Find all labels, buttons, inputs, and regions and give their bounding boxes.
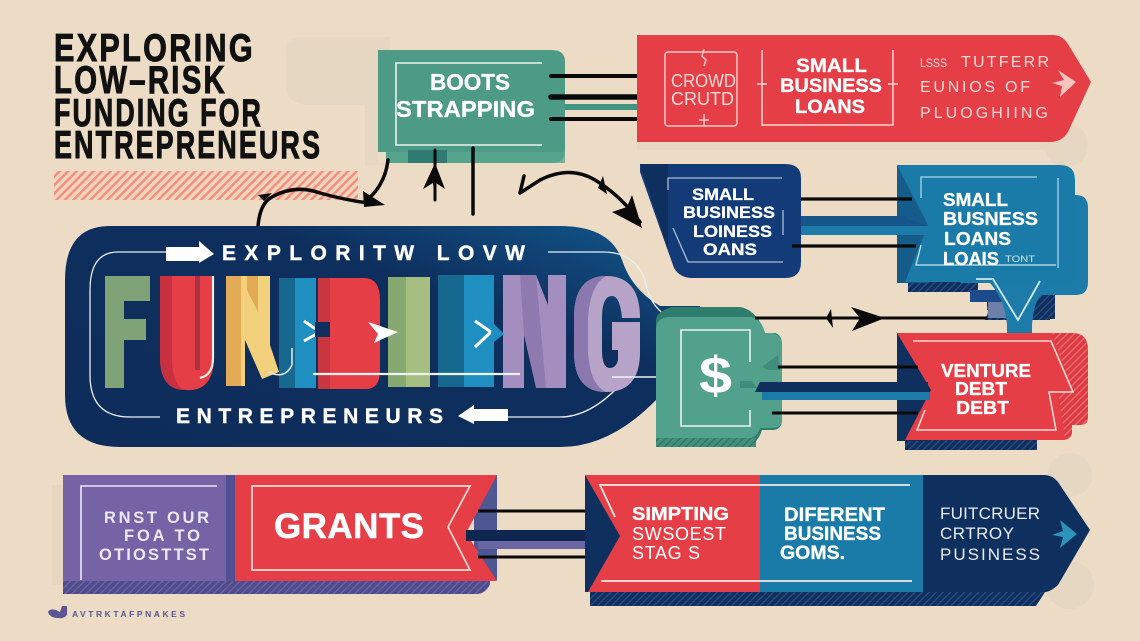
panel: venture debt: DEBT [956, 398, 1009, 418]
panel: navy small business loans: OANS [703, 240, 757, 259]
small business loans: SMALL [796, 56, 867, 77]
letter F [105, 276, 150, 388]
panel: venture debt [897, 333, 1088, 450]
icon: arrow [1052, 70, 1076, 97]
red segment text [632, 504, 729, 563]
crowd box [665, 49, 737, 126]
panel: venture debt: DEBT [955, 379, 1007, 399]
blue segment text: GOMS. [780, 543, 845, 564]
title: EXPLORING [54, 27, 255, 70]
letter I blue second [438, 275, 494, 387]
body text: EUNIOS OF [920, 79, 1030, 96]
panel: blue small business loans callout: SMALL [943, 190, 1008, 210]
funding chevrons and lines [268, 321, 690, 377]
letter U [160, 276, 214, 390]
funding word [105, 275, 640, 392]
title [54, 27, 322, 167]
body text: TUTFERR [961, 54, 1049, 71]
purple text: OTIOSTTST [99, 546, 209, 564]
panel: venture debt: VENTURE [941, 361, 1031, 381]
subheading: entrepreneurs: ENTREPRENEURS [176, 405, 443, 428]
connectors: grants to right row [466, 511, 613, 557]
icon: teal arrow [1052, 520, 1077, 548]
blue segment text: BUSINESS [784, 524, 881, 545]
inner outline [90, 252, 680, 417]
red segment text: SWSOEST [632, 524, 726, 544]
segment: navy arrow [923, 475, 1090, 592]
footer logo [48, 606, 185, 619]
navy segment text: FUITCRUER [940, 504, 1040, 523]
title: LOW–RISK [54, 59, 227, 102]
body text: LSSS [920, 56, 947, 70]
panel: boots strapping [378, 50, 565, 163]
small business loans: LOANS [795, 97, 865, 118]
arrow: left [458, 405, 508, 424]
segment: blue [760, 475, 923, 592]
boots strapping label: BOOTS [430, 69, 510, 95]
panel: grants row [63, 475, 497, 594]
panel: main funding bottle [65, 226, 700, 447]
panel: dollar box [656, 307, 782, 447]
panel: navy small business loans: SMALL [692, 185, 754, 204]
hatched accent bar [54, 171, 358, 200]
letter N purple [503, 275, 566, 388]
boots strapping label: STRAPPING [396, 96, 535, 122]
panel: blue small business loans callout: BUSNESS [943, 209, 1038, 229]
title: FUNDING FOR [54, 92, 263, 135]
icon: dollar sign: $ [699, 347, 732, 405]
red segment text: STAG S [632, 543, 700, 563]
panel: blue small business loans callout: LOAIS [943, 249, 999, 269]
small business loans: BUSINESS [780, 76, 882, 97]
connectors: dollar box to venture debt [755, 307, 987, 413]
body text [920, 54, 1049, 122]
navy segment text: PUSINESS [940, 545, 1040, 564]
letter I blue [279, 278, 316, 388]
letter D red [318, 278, 380, 389]
connector lines: bootstrapping to red banner [551, 76, 657, 119]
letter I green [388, 277, 430, 387]
purple text [99, 509, 209, 564]
heading: exploritw lovw: EXPLORITW LOVW [222, 242, 525, 265]
title: ENTREPRENEURS [54, 124, 322, 167]
segment: red [585, 475, 760, 592]
letter N [226, 276, 279, 386]
crowd box: CROWD [671, 71, 736, 91]
purple text: RNST OUR [104, 509, 209, 527]
connectors: navy to blue callout [792, 199, 928, 246]
panel: navy small business loans [640, 164, 801, 278]
red segment text: SIMPTING [632, 504, 729, 524]
panel: navy small business loans: BUSINESS [683, 203, 775, 222]
small business loans [757, 50, 898, 125]
crowd box: CRUTD [671, 89, 734, 109]
navy segment text [940, 504, 1040, 564]
curved arrows [258, 148, 642, 228]
purple text: FOA TO [124, 527, 200, 545]
panel: blue small business loans callout [897, 165, 1088, 351]
boots strapping label [396, 69, 535, 122]
body text: PLUOGHIING [920, 105, 1048, 122]
panel: blue small business loans callout: LOANS [944, 229, 1011, 249]
panel: small business loans red banner [637, 35, 1091, 142]
letter G purple [574, 276, 640, 392]
footer logo: AVTRKTAFPNAKES [72, 609, 185, 619]
blue segment text: DIFERENT [784, 505, 885, 526]
blue segment text [780, 505, 885, 564]
panel: blue small business loans callout: TONT [1005, 254, 1036, 264]
panel: right bottom arrow row [585, 475, 1090, 606]
navy segment text: CRTROY [940, 524, 1014, 543]
grants label: GRANTS [274, 507, 424, 546]
panel: navy small business loans: LOINESS [693, 222, 772, 241]
arrow: right [166, 241, 214, 263]
